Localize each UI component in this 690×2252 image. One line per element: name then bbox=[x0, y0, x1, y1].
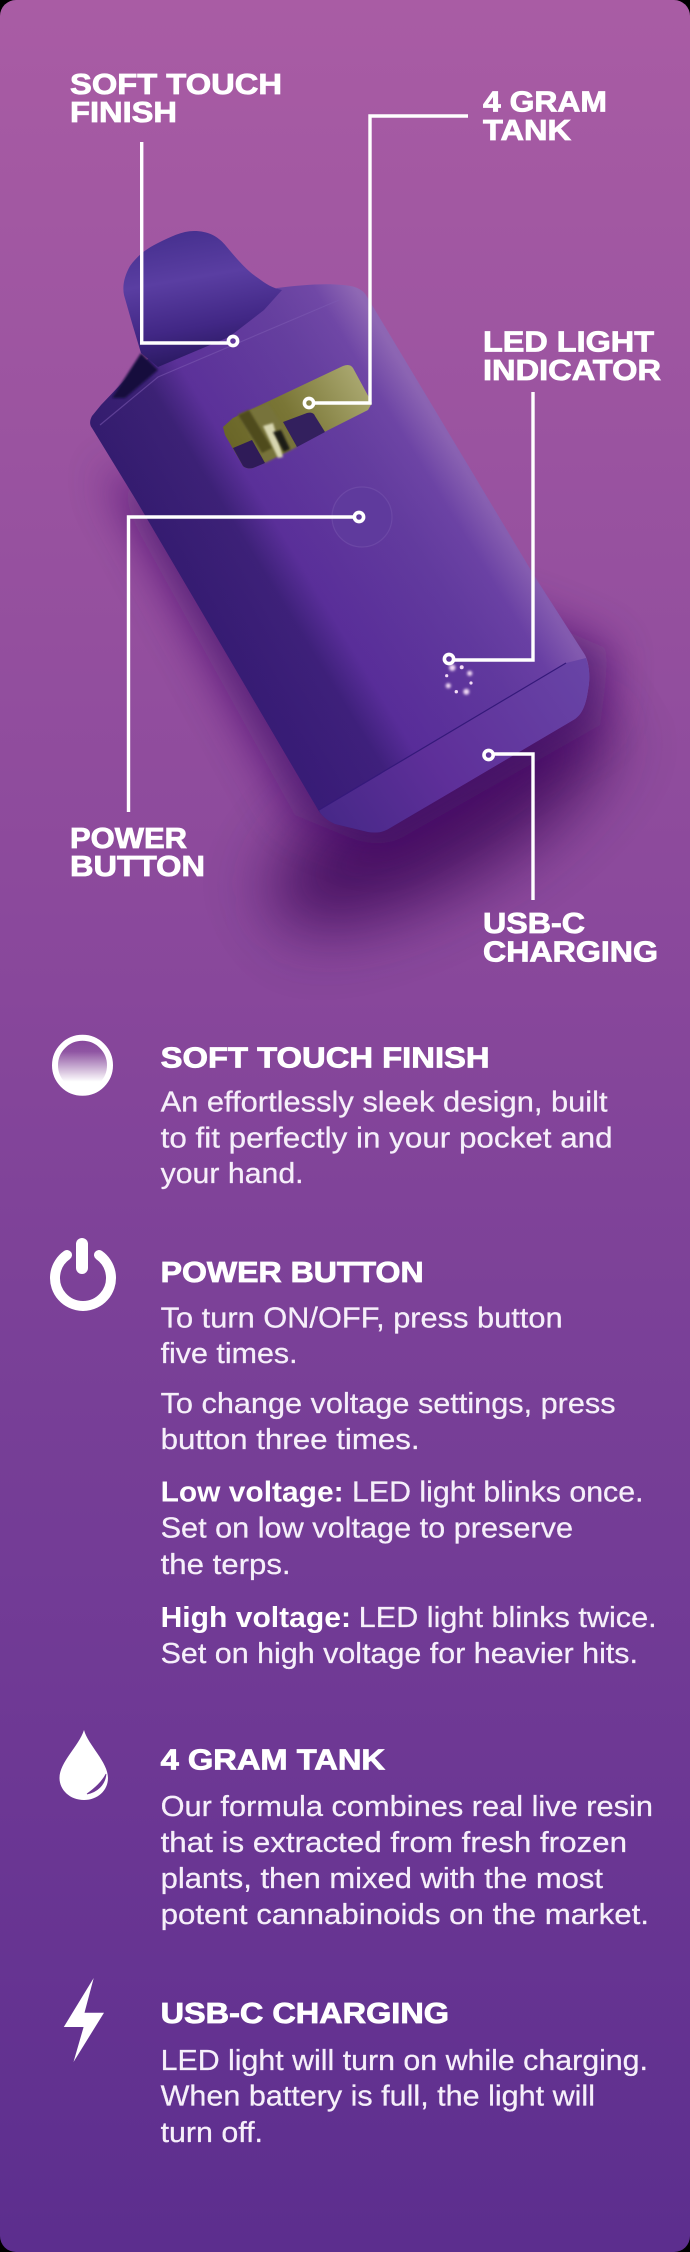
description: An effortlessly sleek design, built bbox=[161, 1087, 608, 1119]
top seam bbox=[100, 300, 339, 425]
heading: POWER BUTTON bbox=[161, 1257, 424, 1289]
tube shadow bbox=[238, 410, 272, 453]
label: BUTTON bbox=[70, 851, 205, 883]
label bbox=[70, 69, 282, 129]
on/off instruction: five times. bbox=[161, 1338, 298, 1370]
LED indicator dots bbox=[445, 664, 473, 695]
label: 4 GRAM bbox=[483, 87, 607, 119]
label: INDICATOR bbox=[483, 355, 661, 387]
on/off instruction: To turn ON/OFF, press button bbox=[161, 1303, 563, 1335]
marker bbox=[354, 512, 364, 522]
tank window bbox=[223, 365, 372, 468]
label: USB-C bbox=[483, 908, 585, 940]
leader line bbox=[128, 517, 354, 812]
description: your hand. bbox=[161, 1158, 304, 1190]
icon: lightning bolt bbox=[64, 1978, 104, 2062]
heading: 4 GRAM TANK bbox=[161, 1745, 385, 1777]
section: power button bbox=[55, 1238, 657, 1670]
label: CHARGING bbox=[483, 937, 658, 969]
description: that is extracted from fresh frozen bbox=[161, 1827, 627, 1859]
high voltage note bbox=[161, 1602, 657, 1670]
label bbox=[483, 87, 607, 147]
description: turn off. bbox=[161, 2117, 263, 2149]
heading: USB-C CHARGING bbox=[161, 1998, 449, 2030]
marker bbox=[484, 750, 493, 760]
mouthpiece shadow notch bbox=[112, 353, 158, 398]
device shadow bbox=[105, 470, 641, 972]
low voltage note: LED light blinks once. bbox=[352, 1477, 644, 1509]
purple block left bbox=[233, 440, 265, 468]
description: When battery is full, the light will bbox=[161, 2081, 595, 2113]
section: USB-C charging bbox=[64, 1978, 648, 2149]
heading: SOFT TOUCH FINISH bbox=[161, 1043, 490, 1075]
label: LED LIGHT bbox=[483, 327, 654, 359]
label: TANK bbox=[483, 115, 571, 147]
description: Our formula combines real live resin bbox=[161, 1791, 653, 1823]
power button on device bbox=[332, 487, 392, 547]
leader line bbox=[494, 754, 533, 900]
bottom seam bbox=[319, 663, 566, 810]
icon: gradient circle bbox=[55, 1038, 110, 1093]
label bbox=[483, 327, 661, 387]
marker bbox=[228, 336, 238, 346]
description bbox=[161, 2045, 648, 2149]
label: SOFT TOUCH bbox=[70, 69, 282, 101]
low voltage note bbox=[161, 1477, 644, 1581]
body shading overlay bbox=[90, 284, 589, 833]
section: soft touch finish bbox=[55, 1038, 613, 1190]
callout: LED light indicator bbox=[444, 327, 661, 664]
leader line bbox=[142, 142, 228, 343]
callout: power button bbox=[70, 512, 364, 883]
low voltage note: Low voltage: bbox=[161, 1477, 344, 1509]
purple block right bbox=[283, 413, 325, 447]
high voltage note: High voltage: bbox=[161, 1602, 351, 1634]
marker bbox=[304, 398, 314, 408]
section: 4 gram tank bbox=[60, 1730, 653, 1931]
product: purple vape device bbox=[90, 231, 589, 833]
label bbox=[70, 823, 205, 883]
voltage instruction bbox=[161, 1388, 616, 1456]
voltage instruction: To change voltage settings, press bbox=[161, 1388, 616, 1420]
on/off instruction bbox=[161, 1303, 563, 1370]
leader line bbox=[314, 116, 468, 403]
label bbox=[483, 908, 658, 969]
description: plants, then mixed with the most bbox=[161, 1863, 603, 1895]
low voltage note: Set on low voltage to preserve bbox=[161, 1513, 573, 1545]
label: FINISH bbox=[70, 97, 177, 129]
callout: 4 gram tank bbox=[304, 87, 607, 408]
high voltage note: LED light blinks twice. bbox=[359, 1602, 657, 1634]
tube dark slit bbox=[273, 430, 290, 452]
liquid tube bbox=[238, 403, 297, 463]
icon: droplet bbox=[60, 1730, 108, 1800]
description: potent cannabinoids on the market. bbox=[161, 1899, 649, 1931]
callout: USB-C charging bbox=[483, 750, 658, 969]
tube highlight bbox=[263, 423, 283, 458]
description bbox=[161, 1087, 613, 1190]
description: to fit perfectly in your pocket and bbox=[161, 1123, 613, 1155]
description: LED light will turn on while charging. bbox=[161, 2045, 648, 2077]
leader line bbox=[454, 392, 533, 660]
voltage instruction: button three times. bbox=[161, 1424, 420, 1456]
description bbox=[161, 1791, 653, 1931]
device body bbox=[90, 284, 589, 833]
icon: power symbol bbox=[55, 1238, 111, 1306]
marker bbox=[444, 654, 454, 664]
bottom cap section bbox=[319, 658, 589, 833]
callout: soft touch finish bbox=[70, 69, 282, 346]
window glass bbox=[223, 365, 372, 468]
high voltage note: Set on high voltage for heavier hits. bbox=[161, 1638, 638, 1670]
low voltage note: the terps. bbox=[161, 1549, 291, 1581]
label: POWER bbox=[70, 823, 187, 855]
mouthpiece bbox=[123, 231, 282, 367]
